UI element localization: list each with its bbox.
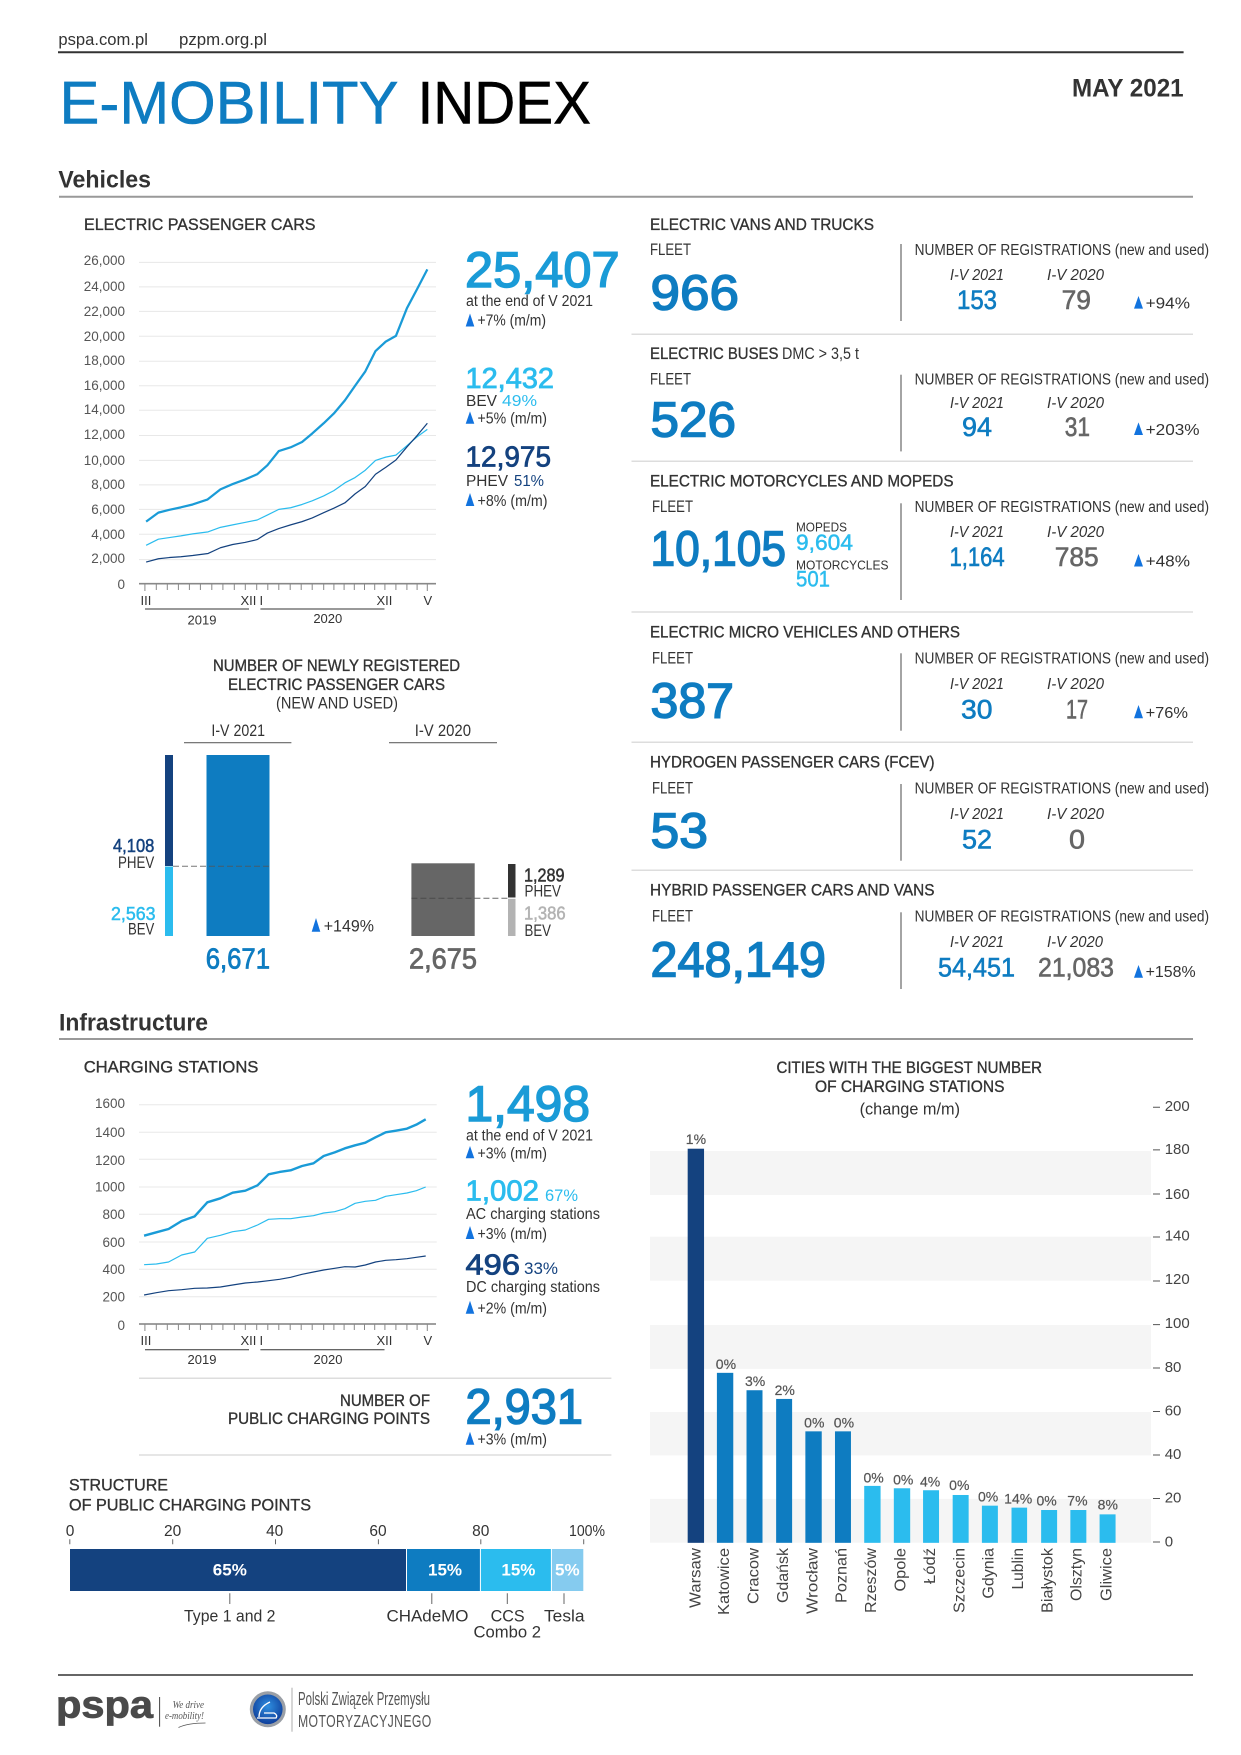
line chart: fleet of electric passenger cars: 12,000 <box>84 427 125 442</box>
stat: total electric cars 25,407 <box>465 242 620 330</box>
bar labels <box>184 1593 585 1642</box>
stat: AC stations 1,002: 1,002 <box>466 1175 539 1207</box>
panel: electric motorcycles and mopeds: +48% <box>1146 554 1190 570</box>
line chart: fleet of electric passenger cars: 8,000 <box>91 477 125 492</box>
panel: electric vans and trucks: +94% <box>1146 296 1190 313</box>
panel: electric motorcycles and mopeds: I-V 2020 <box>1047 524 1104 541</box>
panel: electric micro vehicles and others: 30 <box>961 694 992 724</box>
change +149%: +149% <box>324 917 374 936</box>
panel: electric motorcycles and mopeds: 10,105 <box>650 522 786 576</box>
heading: electric passenger cars: ELECTRIC PASSENGER CARS <box>84 215 316 234</box>
city names: Rzeszów <box>863 1548 880 1613</box>
line chart: charging stations: V <box>424 1333 432 1348</box>
stat: PHEV 12,975: 51% <box>514 473 544 490</box>
city names: Lublin <box>1010 1548 1027 1590</box>
heading: newly registered cars: (NEW AND USED) <box>276 695 398 713</box>
percent axis: 0 <box>66 1523 75 1540</box>
panel: electric vans and trucks: ELECTRIC VANS AND TRUCKS <box>650 215 874 234</box>
bar percentage labels: 7% <box>1067 1493 1088 1509</box>
column: I-V 2021: 2,563 <box>111 904 156 924</box>
stat: DC stations 496: DC charging stations <box>466 1279 600 1296</box>
column: I-V 2021: 6,671 <box>206 943 270 975</box>
column: I-V 2020: 1,289 <box>524 866 564 886</box>
stat: public charging points 2,931: NUMBER OF <box>340 1391 430 1410</box>
heading: cities: OF CHARGING STATIONS <box>815 1077 1004 1096</box>
panel: hydrogen passenger cars: I-V 2021 <box>950 806 1004 823</box>
panel: electric vans and trucks: I-V 2021 <box>950 267 1004 284</box>
y axis: 0 <box>1165 1534 1173 1551</box>
panel: hybrid passenger cars and vans: 248,149 <box>650 934 826 988</box>
y axis: 160 <box>1165 1186 1190 1203</box>
stat: PHEV 12,975 <box>466 442 551 510</box>
logo: PSPA <box>56 1684 206 1728</box>
line chart: fleet of electric passenger cars: 2020 <box>313 611 342 626</box>
city names: Opole <box>892 1548 910 1592</box>
column: I-V 2021: I-V 2021 <box>211 722 265 740</box>
title <box>60 68 591 136</box>
panel: electric micro vehicles and others: +76% <box>1146 705 1188 722</box>
panel: electric motorcycles and mopeds: NUMBER OF REGISTRATIONS (new and used) <box>915 499 1209 516</box>
bar percentage labels: 0% <box>978 1489 998 1505</box>
panel: hybrid passenger cars and vans: I-V 2020 <box>1047 934 1103 951</box>
panel: cities with the biggest number of charging stations <box>650 1058 1190 1615</box>
line chart: fleet of electric passenger cars: 14,000 <box>84 402 125 417</box>
panel: electric motorcycles and mopeds: 9,604 <box>796 530 853 555</box>
column: I-V 2020: BEV <box>524 922 551 940</box>
city names: Łódź <box>922 1548 939 1584</box>
section heading: vehicles: Vehicles <box>58 167 151 194</box>
logo: Polski Związek Przemysłu Motoryzacyjnego: Polski Związek Przemysłu <box>298 1689 430 1709</box>
stat: total stations 1,498: at the end of V 2021 <box>466 1128 593 1145</box>
panel: electric buses: ELECTRIC BUSES <box>650 344 778 363</box>
section heading: infrastructure: Infrastructure <box>59 1010 208 1037</box>
line chart: fleet of electric passenger cars: 0 <box>117 577 125 592</box>
line chart: fleet of electric passenger cars: 2,000 <box>91 551 125 566</box>
bar percentage labels: 3% <box>745 1373 765 1389</box>
bar labels: CHAdeMO <box>386 1608 469 1626</box>
stacked bar: 15% <box>428 1560 462 1579</box>
panel: electric buses: NUMBER OF REGISTRATIONS (new and used) <box>915 372 1209 388</box>
panel: electric micro vehicles and others: I-V 2021 <box>950 676 1004 693</box>
title: INDEX <box>418 68 591 136</box>
line chart: fleet of electric passenger cars: 18,000 <box>84 353 125 368</box>
panel: electric motorcycles and mopeds: MOTORCYCLES <box>796 557 889 572</box>
title: E-MOBILITY <box>60 68 398 136</box>
stat: DC stations 496: +2% (m/m) <box>478 1301 547 1318</box>
heading: structure: STRUCTURE <box>69 1476 168 1495</box>
y axis: 120 <box>1165 1271 1190 1288</box>
column: I-V 2020: PHEV <box>524 883 561 901</box>
bar percentage labels: 14% <box>1004 1490 1032 1506</box>
panel: hybrid passenger cars and vans: +158% <box>1146 964 1196 981</box>
panel: electric vans and trucks: 153 <box>957 285 997 315</box>
line chart: charging stations: 0 <box>117 1318 125 1333</box>
line chart: fleet of electric passenger cars: III <box>140 593 151 608</box>
city names: Gdańsk <box>775 1547 792 1603</box>
line chart: fleet of electric passenger cars: V <box>424 593 432 608</box>
y axis: 140 <box>1165 1227 1190 1244</box>
panel: electric motorcycles and mopeds: I-V 2021 <box>950 524 1004 541</box>
line chart: charging stations: 1600 <box>95 1096 125 1111</box>
panel: electric vans and trucks: FLEET <box>650 241 691 259</box>
header links: pspa.com.pl <box>58 31 148 49</box>
bars <box>688 1149 1116 1543</box>
heading: cities <box>776 1058 1042 1118</box>
line chart: charging stations: 2020 <box>314 1352 342 1367</box>
city names: Szczecin <box>951 1548 968 1613</box>
panel: electric motorcycles and mopeds: MOPEDS <box>796 519 847 534</box>
panel: electric micro vehicles and others: FLEET <box>652 649 693 667</box>
panel: hybrid passenger cars and vans: FLEET <box>652 907 693 925</box>
stat: AC stations 1,002 <box>466 1175 600 1243</box>
stat: total stations 1,498: 1,498 <box>466 1076 590 1132</box>
column: I-V 2021 <box>111 722 291 975</box>
percent axis: 40 <box>266 1523 284 1540</box>
percent axis: 80 <box>472 1523 490 1540</box>
panel: electric buses: 94 <box>962 412 992 442</box>
panel: electric micro vehicles and others <box>650 622 1209 731</box>
column: I-V 2021: 4,108 <box>113 836 154 856</box>
panel: hybrid passenger cars and vans: I-V 2021 <box>950 934 1004 951</box>
heading: newly registered cars <box>213 657 460 713</box>
bar percentage labels: 1% <box>686 1131 706 1147</box>
column: I-V 2021: PHEV <box>118 854 154 872</box>
bar percentage labels: 0% <box>834 1415 854 1431</box>
panel: newly registered electric passenger cars <box>111 657 566 975</box>
line chart: charging stations: 800 <box>102 1207 125 1222</box>
city names: Katowice <box>716 1548 733 1615</box>
panel: electric micro vehicles and others: 387 <box>650 674 734 728</box>
panel: hydrogen passenger cars: NUMBER OF REGISTRATIONS (new and used) <box>915 780 1209 797</box>
city names: Gliwice <box>1099 1548 1116 1601</box>
stat: DC stations 496 <box>466 1249 600 1318</box>
city names: Cracow <box>746 1548 763 1604</box>
stat: public charging points 2,931: +3% (m/m) <box>478 1432 547 1449</box>
line chart: fleet of electric passenger cars: 2019 <box>188 612 216 628</box>
logo: PSPA: pspa <box>56 1684 154 1726</box>
panel: hybrid passenger cars and vans: 21,083 <box>1038 953 1114 983</box>
logo: PSPA: We drive <box>173 1700 204 1711</box>
line chart: fleet of electric passenger cars: 20,000 <box>84 329 125 344</box>
panel: electric micro vehicles and others: ELECTRIC MICRO VEHICLES AND OTHERS <box>650 622 960 641</box>
y axis: 20 <box>1165 1490 1181 1507</box>
line chart: charging stations: 600 <box>102 1235 125 1250</box>
header links: pzpm.org.pl <box>179 31 267 49</box>
stacked bar <box>70 1549 583 1591</box>
panel: charging stations <box>84 1058 600 1367</box>
panel: structure of public charging points <box>66 1476 605 1642</box>
panel: electric vans and trucks: NUMBER OF REGISTRATIONS (new and used) <box>915 242 1209 259</box>
heading: structure: OF PUBLIC CHARGING POINTS <box>69 1496 311 1515</box>
y axis: 100 <box>1165 1315 1190 1332</box>
panel: electric motorcycles and mopeds: ELECTRIC MOTORCYCLES AND MOPEDS <box>650 472 954 490</box>
panel: electric buses: I-V 2020 <box>1047 395 1104 412</box>
line chart: charging stations: 200 <box>102 1290 125 1304</box>
panel: hydrogen passenger cars <box>650 753 1209 861</box>
city names: Białystok <box>1040 1547 1056 1613</box>
stat: PHEV 12,975: 12,975 <box>466 442 551 474</box>
logo: PSPA: e-mobility! <box>165 1711 204 1722</box>
city names: Olsztyn <box>1069 1548 1086 1601</box>
line chart: fleet of electric passenger cars: 16,000 <box>84 378 125 393</box>
stat: DC stations 496: 33% <box>524 1259 558 1278</box>
panel: hydrogen passenger cars: I-V 2020 <box>1047 806 1104 823</box>
panel: electric vans and trucks: 79 <box>1062 285 1091 315</box>
line chart: charging stations: 2019 <box>188 1352 216 1367</box>
stat: AC stations 1,002: AC charging stations <box>466 1206 600 1223</box>
panel: electric buses: 526 <box>650 394 736 448</box>
stat: total electric cars 25,407: at the end of V 2021 <box>466 293 593 310</box>
bar labels: Combo 2 <box>474 1624 541 1642</box>
stat: PHEV 12,975: +8% (m/m) <box>478 493 548 510</box>
stat: public charging points 2,931: PUBLIC CHARGING POINTS <box>228 1409 430 1428</box>
line chart: charging stations: I <box>260 1333 263 1348</box>
stacked bar: 15% <box>501 1560 535 1579</box>
stat: BEV 12,432: 49% <box>502 393 537 410</box>
panel: electric micro vehicles and others: NUMBER OF REGISTRATIONS (new and used) <box>915 650 1209 667</box>
line chart: charging stations: 400 <box>102 1262 125 1277</box>
bar percentage labels <box>686 1131 1118 1513</box>
stat: DC stations 496: 496 <box>466 1249 520 1281</box>
panel: electric buses: +203% <box>1146 422 1200 439</box>
logo: Polski Związek Przemysłu Motoryzacyjnego: MOTORYZACYJNEGO <box>298 1712 431 1732</box>
column: I-V 2021: BEV <box>128 920 154 938</box>
city names: Poznań <box>834 1548 851 1603</box>
line chart: charging stations <box>95 1096 437 1367</box>
percent axis: 100% <box>569 1523 605 1540</box>
heading: structure <box>69 1476 311 1515</box>
panel: hybrid passenger cars and vans <box>650 881 1209 989</box>
date: MAY 2021 <box>1072 74 1184 102</box>
panel: electric buses: 31 <box>1065 412 1090 442</box>
stat: total electric cars 25,407: +7% (m/m) <box>478 313 546 330</box>
line chart: fleet of electric passenger cars <box>84 253 436 628</box>
panel: electric motorcycles and mopeds: FLEET <box>652 498 693 516</box>
stat: public charging points 2,931 <box>228 1380 583 1449</box>
y axis <box>1153 1098 1190 1551</box>
stat: AC stations 1,002: 67% <box>545 1186 578 1205</box>
panel: electric vans and trucks: 966 <box>650 266 739 320</box>
city names <box>688 1547 1116 1615</box>
heading: charging stations: CHARGING STATIONS <box>84 1058 258 1077</box>
panel: electric vans and trucks <box>650 215 1209 321</box>
line chart: fleet of electric passenger cars: 4,000 <box>91 527 125 542</box>
stat: total electric cars 25,407: 25,407 <box>465 242 620 298</box>
bar percentage labels: 0% <box>949 1477 969 1493</box>
panel: electric motorcycles and mopeds: 1,164 <box>950 542 1005 572</box>
line chart: fleet of electric passenger cars: 26,000 <box>84 253 125 268</box>
panel: electric passenger cars <box>84 215 620 628</box>
bar labels: CCS <box>491 1608 525 1626</box>
panel: electric motorcycles and mopeds: 785 <box>1055 542 1099 572</box>
line chart: charging stations: III <box>140 1333 151 1348</box>
percent axis: 60 <box>369 1523 387 1540</box>
stat: BEV 12,432: BEV <box>466 393 497 410</box>
stat: BEV 12,432: +5% (m/m) <box>478 411 547 428</box>
heading: newly registered cars: NUMBER OF NEWLY REGISTERED <box>213 657 460 675</box>
line chart: fleet of electric passenger cars: 22,000 <box>84 304 125 319</box>
bar percentage labels: 4% <box>920 1474 940 1490</box>
y axis: 180 <box>1165 1141 1190 1158</box>
stat: total stations 1,498 <box>466 1076 593 1162</box>
stat: BEV 12,432 <box>466 363 554 428</box>
stat: BEV 12,432: 12,432 <box>466 363 554 395</box>
panel: hybrid passenger cars and vans: 54,451 <box>938 953 1015 983</box>
line chart: fleet of electric passenger cars: XII <box>240 593 256 608</box>
bar percentage labels: 0% <box>863 1469 884 1485</box>
line chart: charging stations: XII <box>376 1333 392 1348</box>
stat: PHEV 12,975: PHEV <box>466 473 508 490</box>
city names: Warsaw <box>688 1548 704 1608</box>
y axis: 40 <box>1165 1446 1181 1463</box>
panel: electric buses <box>650 344 1209 451</box>
y axis: 80 <box>1165 1359 1181 1376</box>
column: I-V 2020: 1,386 <box>524 903 566 923</box>
header links <box>58 31 267 49</box>
bar percentage labels: 0% <box>716 1356 736 1372</box>
panel: electric buses: FLEET <box>650 370 691 388</box>
column: I-V 2020: 2,675 <box>409 943 477 975</box>
panel: electric micro vehicles and others: 17 <box>1066 694 1088 724</box>
line chart: charging stations: 1200 <box>95 1153 125 1168</box>
city names: Wrocław <box>804 1548 822 1614</box>
line chart: charging stations: 1000 <box>95 1180 125 1194</box>
percent axis: 20 <box>164 1523 182 1540</box>
y axis: 200 <box>1165 1098 1190 1115</box>
bar labels: Tesla <box>544 1608 585 1626</box>
percent axis <box>66 1523 605 1544</box>
stat: AC stations 1,002: +3% (m/m) <box>478 1226 547 1243</box>
bar percentage labels: 8% <box>1098 1497 1118 1513</box>
panel: hybrid passenger cars and vans: NUMBER OF REGISTRATIONS (new and used) <box>915 908 1209 925</box>
bar percentage labels: 0% <box>893 1472 913 1488</box>
bar percentage labels: 0% <box>804 1415 824 1431</box>
stacked bar: 5% <box>555 1560 580 1579</box>
line chart: fleet of electric passenger cars: 24,000 <box>84 279 125 294</box>
line chart: fleet of electric passenger cars: 10,000 <box>84 453 125 468</box>
panel: hybrid passenger cars and vans: HYBRID PASSENGER CARS AND VANS <box>650 881 934 900</box>
heading: newly registered cars: ELECTRIC PASSENGER CARS <box>228 676 445 694</box>
stat: total stations 1,498: +3% (m/m) <box>478 1145 547 1162</box>
bar percentage labels: 0% <box>1036 1493 1057 1509</box>
panel: electric micro vehicles and others: I-V 2020 <box>1047 676 1104 693</box>
panel: electric motorcycles and mopeds <box>650 472 1209 600</box>
line chart: fleet of electric passenger cars: I <box>260 593 263 608</box>
stacked bar: 65% <box>213 1560 247 1579</box>
column: I-V 2020: I-V 2020 <box>415 722 471 740</box>
stat: public charging points 2,931: 2,931 <box>466 1380 583 1434</box>
panel: electric vans and trucks: I-V 2020 <box>1047 267 1104 284</box>
panel: electric buses: DMC > 3,5 t <box>782 345 859 363</box>
line chart: charging stations: XII <box>240 1333 256 1348</box>
city names: Gdynia <box>981 1548 998 1599</box>
y axis: 60 <box>1165 1402 1181 1419</box>
logo: Polski Związek Przemysłu Motoryzacyjnego <box>250 1688 431 1732</box>
bar percentage labels: 2% <box>775 1382 795 1398</box>
panel: hydrogen passenger cars: 0 <box>1069 824 1085 854</box>
panel: hydrogen passenger cars: 53 <box>650 805 708 859</box>
column: I-V 2020 <box>389 722 566 975</box>
line chart: fleet of electric passenger cars: XII <box>376 593 392 608</box>
heading: cities: (change m/m) <box>860 1100 960 1118</box>
line chart: fleet of electric passenger cars: 6,000 <box>91 502 125 517</box>
panel: electric buses: I-V 2021 <box>950 395 1004 412</box>
line chart: charging stations: 1400 <box>95 1125 125 1140</box>
panel: electric motorcycles and mopeds: 501 <box>796 566 830 592</box>
panel: hydrogen passenger cars: FLEET <box>652 779 693 797</box>
panel: hydrogen passenger cars: 52 <box>962 824 992 854</box>
panel: hydrogen passenger cars: HYDROGEN PASSENGER CARS (FCEV) <box>650 753 934 772</box>
bar labels: Type 1 and 2 <box>184 1608 276 1626</box>
heading: cities: CITIES WITH THE BIGGEST NUMBER <box>776 1058 1042 1077</box>
